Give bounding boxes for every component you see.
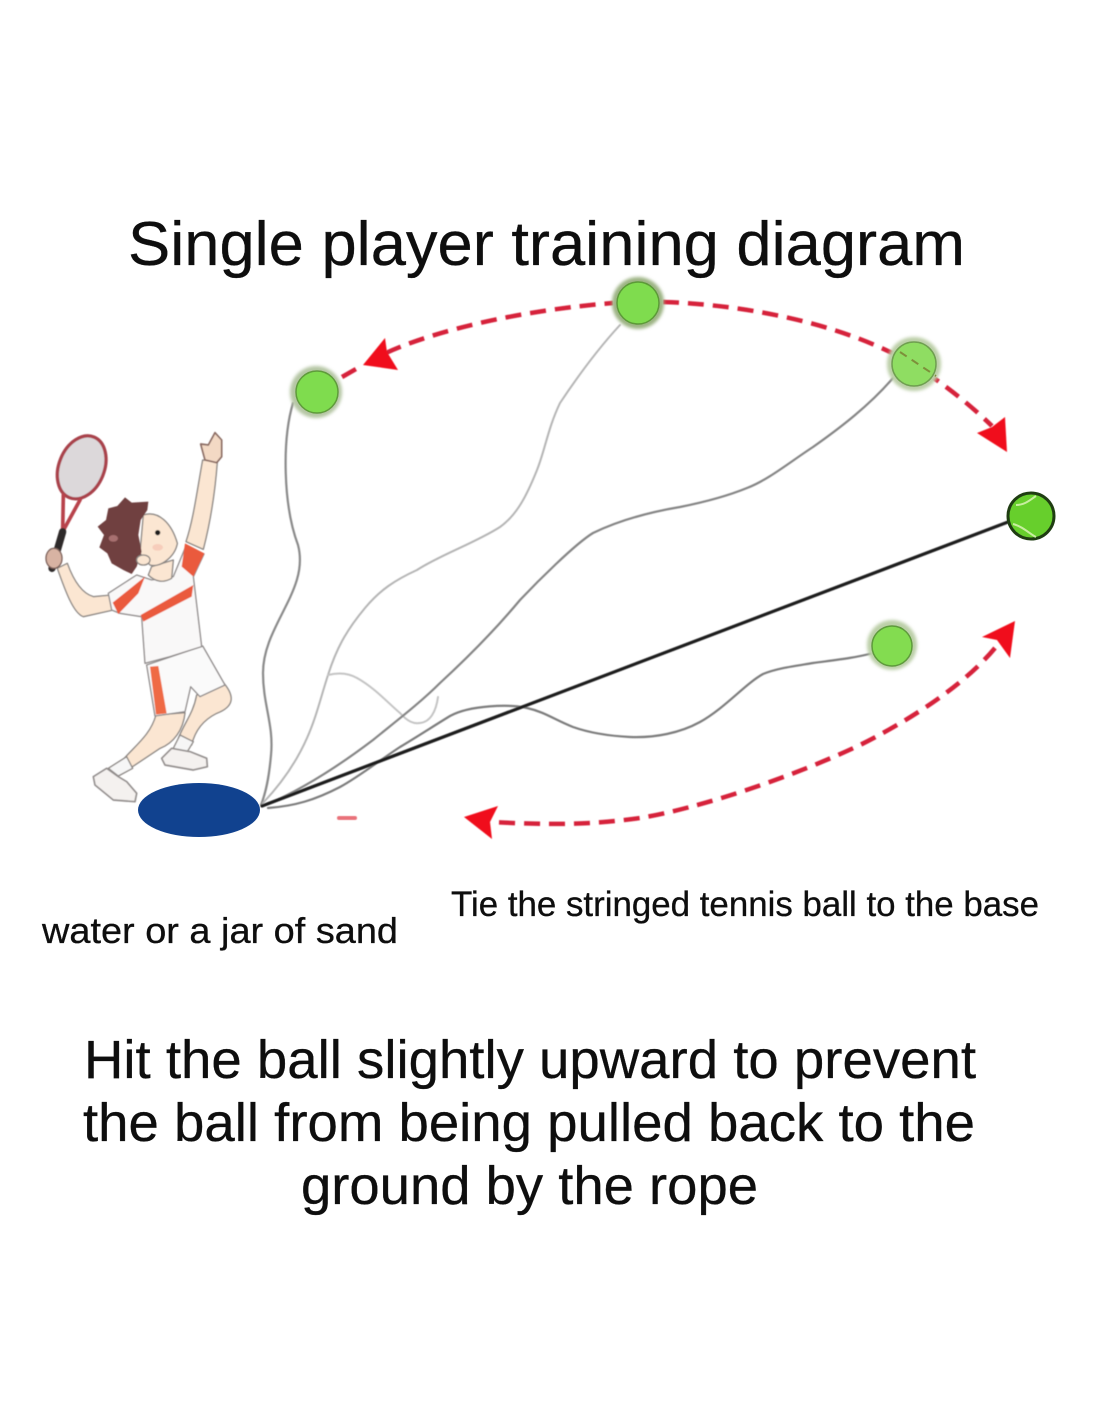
shoes (93, 748, 207, 802)
string to upper left ball (261, 403, 300, 805)
front leg (178, 683, 231, 745)
strings from base to balls (261, 325, 1008, 808)
string to low right ball (268, 653, 873, 808)
arrowhead: bottom left (464, 806, 498, 839)
eye (155, 530, 160, 535)
instruction text: the ball from being pulled back to the (83, 1093, 975, 1153)
arrowhead: bottom right (982, 621, 1015, 658)
instruction text (83, 1030, 976, 1216)
ball: low right (867, 620, 917, 670)
neck (148, 560, 173, 581)
raised hand (201, 433, 222, 463)
label: string tie: Tie the stringed tennis ball to the base (451, 885, 1039, 924)
string to upper right ball (268, 378, 893, 804)
racket (48, 429, 115, 568)
racket arm (57, 563, 113, 617)
shirt stripes (113, 543, 204, 622)
instruction text: ground by the rope (301, 1156, 758, 1216)
shorts (147, 646, 225, 716)
player figure (46, 429, 231, 802)
shirt (108, 548, 204, 663)
hair highlight (109, 535, 118, 542)
arrowhead: top left (363, 338, 398, 370)
dashed arc: bottom, toward the player (490, 648, 995, 824)
string to top ball (263, 325, 620, 803)
arrowhead: top right (977, 417, 1007, 452)
racket hand (46, 548, 62, 568)
ball: main, at rest (1008, 493, 1054, 539)
cheek (152, 544, 163, 551)
instruction text: Hit the ball slightly upward to prevent (84, 1030, 976, 1090)
dashed arc: top, toward the player (342, 303, 613, 377)
base: water or sand jar (138, 783, 260, 837)
taut black string (262, 522, 1008, 806)
dashed arc: top right, downward (663, 302, 992, 426)
small red mark (337, 816, 357, 820)
loose loop of string (328, 674, 438, 723)
label: base: water or a jar of sand (41, 910, 398, 951)
face (140, 514, 177, 566)
ball: top (612, 277, 664, 329)
ball: upper left (290, 366, 342, 418)
raised arm (186, 460, 217, 549)
hair (98, 497, 148, 574)
ball: upper right (887, 337, 941, 391)
ear (137, 555, 150, 565)
back leg (120, 713, 185, 768)
socks (108, 735, 193, 776)
shorts stripe (150, 666, 167, 715)
title: Single player training diagram (128, 210, 965, 279)
